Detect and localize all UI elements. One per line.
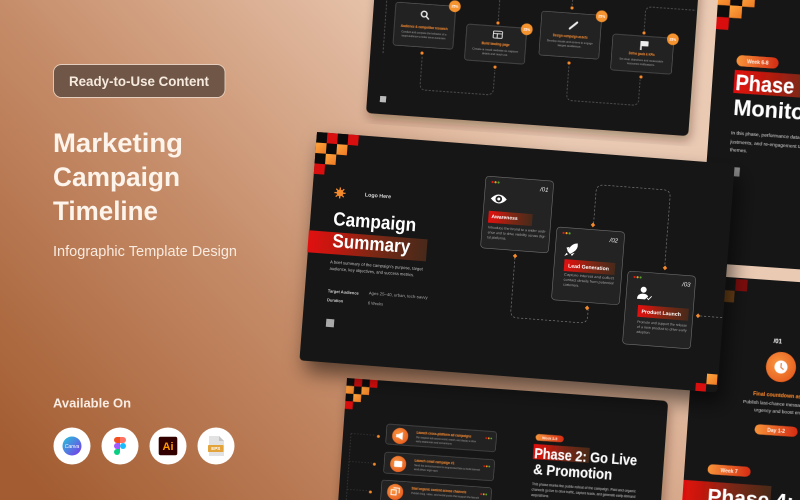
details table: 6 Weeks	[368, 300, 383, 307]
icon: flag	[640, 41, 649, 51]
card: landing page: Create a mock website to capture	[472, 46, 519, 54]
card: Awareness	[480, 176, 554, 253]
heading: & Promotion	[533, 461, 613, 484]
card: ad campaigns: Run targeted ads across social, search, and display to drive	[416, 435, 476, 443]
label: Product Launch	[641, 309, 681, 318]
label: Lead Generation	[568, 263, 609, 272]
icon: Canva: Canva	[65, 444, 79, 450]
available on heading: Available On	[53, 396, 131, 410]
description	[531, 482, 636, 500]
step number: /03	[681, 282, 691, 289]
panel: top slide, creative tasks	[366, 0, 703, 136]
card: email campaign: Launch email campaign #1	[414, 459, 455, 465]
description: Promote and support the release	[637, 320, 687, 328]
percent badge: 25%	[523, 27, 530, 32]
pixel corner	[716, 0, 755, 32]
card: campaign assets: Develop visuals and content to engage	[547, 38, 593, 46]
description: Introduce the brand to a wider audi-	[488, 225, 547, 234]
card: goals: Set clear objectives and measurable	[619, 56, 664, 64]
description: adoption.	[636, 330, 651, 335]
description: audience, key objectives, and success metrics.	[329, 266, 415, 277]
icon: clock	[765, 351, 797, 383]
card: research: Conduct and compare the behavior of a	[401, 30, 447, 37]
heading: Summary	[332, 231, 411, 258]
description: Capture interest and collect	[564, 273, 614, 280]
week pill: Week 7	[720, 468, 738, 475]
connector nodes	[420, 0, 647, 79]
card: landing page	[464, 19, 533, 65]
card: campaign assets: target audience.	[557, 43, 582, 49]
window dots	[485, 437, 492, 439]
week pill: Week 6-8	[747, 59, 769, 67]
description: ence and to drive visibility across digi-	[488, 230, 547, 239]
icon: email	[390, 455, 407, 473]
step number: /01	[539, 187, 549, 194]
window dots	[633, 276, 642, 279]
description	[636, 320, 687, 338]
description: tal platforms.	[487, 235, 506, 241]
card: campaign assets: Design campaign assets	[553, 33, 588, 40]
heading: Phase	[735, 70, 795, 99]
label: Awareness	[491, 214, 518, 222]
percent badge: 25%	[598, 14, 605, 19]
icon: megaphone	[392, 427, 409, 445]
title: Campaign	[53, 162, 180, 192]
heading: Phase 2: Go Live	[534, 445, 638, 469]
icon: content stack	[387, 483, 404, 500]
card: research	[393, 0, 461, 50]
card: ad campaigns: Launch cross-platform ad campaigns	[416, 431, 471, 439]
badge: ready-to-use content: Ready-to-Use Content	[69, 73, 209, 89]
card: campaign assets	[539, 6, 608, 60]
percent badge: 25%	[669, 37, 676, 42]
description: themes.	[730, 147, 747, 154]
card: ad campaigns: early awareness and conversions	[416, 439, 452, 445]
card: email campaign: and drive sign-ups	[414, 467, 438, 473]
pixel corner	[314, 132, 359, 177]
icon: page marker	[380, 96, 386, 102]
description: A brief summary of the campaign's purpose, target	[330, 259, 424, 272]
description: acquisitions.	[531, 493, 549, 498]
card: Lead Generation	[551, 227, 625, 305]
title: Marketing	[53, 128, 183, 158]
description: channels go live to drive traffic, capture leads, and generate early demand	[531, 487, 635, 499]
step number: /01	[773, 339, 783, 345]
panel: main slide, Campaign Summary	[299, 132, 736, 393]
icon: person with check	[637, 286, 652, 300]
card: organic content: Start organic content across channels	[411, 487, 466, 495]
week pill	[736, 55, 779, 69]
heading	[532, 444, 638, 485]
subtitle: Infographic Template Design	[53, 244, 237, 260]
card: organic content	[380, 480, 492, 500]
percent badge: 25%	[451, 4, 458, 9]
card: research: target audience to better serve customers	[401, 34, 446, 41]
step number: /02	[608, 238, 619, 245]
icon: EPS file	[198, 428, 234, 464]
title: Timeline	[53, 196, 158, 226]
icon: Figma	[102, 428, 138, 464]
description	[487, 225, 547, 244]
description: of a new product to drive early	[637, 325, 687, 333]
window dots	[562, 232, 571, 235]
panel: right slide, Phase 3 monitoring	[700, 0, 800, 276]
card: email campaign: Send the announcement to segmented lists to build interest	[414, 463, 480, 472]
description: contact details from potential	[563, 278, 614, 285]
icon: brush	[570, 22, 577, 29]
window dots	[483, 465, 490, 467]
day pill: Day 1-2	[767, 428, 785, 435]
dashed connectors	[510, 179, 733, 334]
pixel corner	[345, 378, 378, 411]
card: email campaign	[384, 452, 495, 481]
icon: EPS file: EPS	[211, 446, 220, 451]
details table	[327, 287, 429, 310]
title	[53, 128, 183, 226]
icon: rocket	[564, 243, 578, 257]
day pill	[754, 424, 798, 437]
description	[729, 130, 800, 160]
heading	[731, 70, 800, 129]
details table: Duration	[327, 297, 344, 304]
details table: Target Audience	[328, 288, 360, 296]
icon: page marker	[326, 319, 334, 327]
panel: right slide, Phase 4	[677, 275, 800, 500]
card: goals: Define goals & KPIs	[629, 51, 655, 57]
heading	[682, 480, 800, 500]
card: goals: success indicators.	[627, 61, 655, 67]
description	[329, 259, 424, 278]
panel: bottom slide, Phase 2	[333, 378, 668, 500]
description	[563, 273, 614, 290]
step text	[742, 390, 800, 418]
card: landing page: Build landing page	[482, 41, 510, 47]
icon: page layout	[493, 31, 503, 39]
window dots	[491, 181, 500, 184]
card: landing page: details and reach out.	[482, 51, 508, 57]
connector nodes	[509, 217, 707, 319]
description: This phase marks the public rollout of the campaign. Paid and organic	[532, 482, 636, 493]
icon: magnifier	[421, 11, 429, 19]
icon: Adobe Illustrator	[150, 428, 186, 464]
card: research: Audience & competitor research	[401, 24, 448, 31]
icon: Adobe Illustrator: Ai	[162, 441, 174, 453]
card: ad campaigns	[386, 424, 497, 452]
details table: Ages 25–40, urban, tech-savvy	[369, 290, 429, 300]
pixel corner, bottom right	[695, 373, 718, 392]
week pill	[536, 434, 564, 442]
heading: Campaign	[333, 209, 417, 236]
week pill: Week 3-5	[542, 436, 557, 441]
heading	[307, 207, 429, 261]
logo: Logo Here	[365, 192, 391, 200]
window dots	[480, 493, 487, 495]
badge: ready-to-use content	[54, 64, 225, 98]
icon: eye	[490, 194, 507, 204]
card: Product Launch	[622, 271, 696, 349]
logo	[334, 187, 392, 202]
pixel corner	[722, 278, 748, 303]
week pill	[707, 464, 751, 477]
description: customers.	[563, 283, 579, 288]
card: goals	[611, 29, 679, 75]
icon: page marker	[730, 167, 740, 177]
icon: Canva	[54, 428, 90, 464]
connector nodes	[369, 435, 380, 494]
